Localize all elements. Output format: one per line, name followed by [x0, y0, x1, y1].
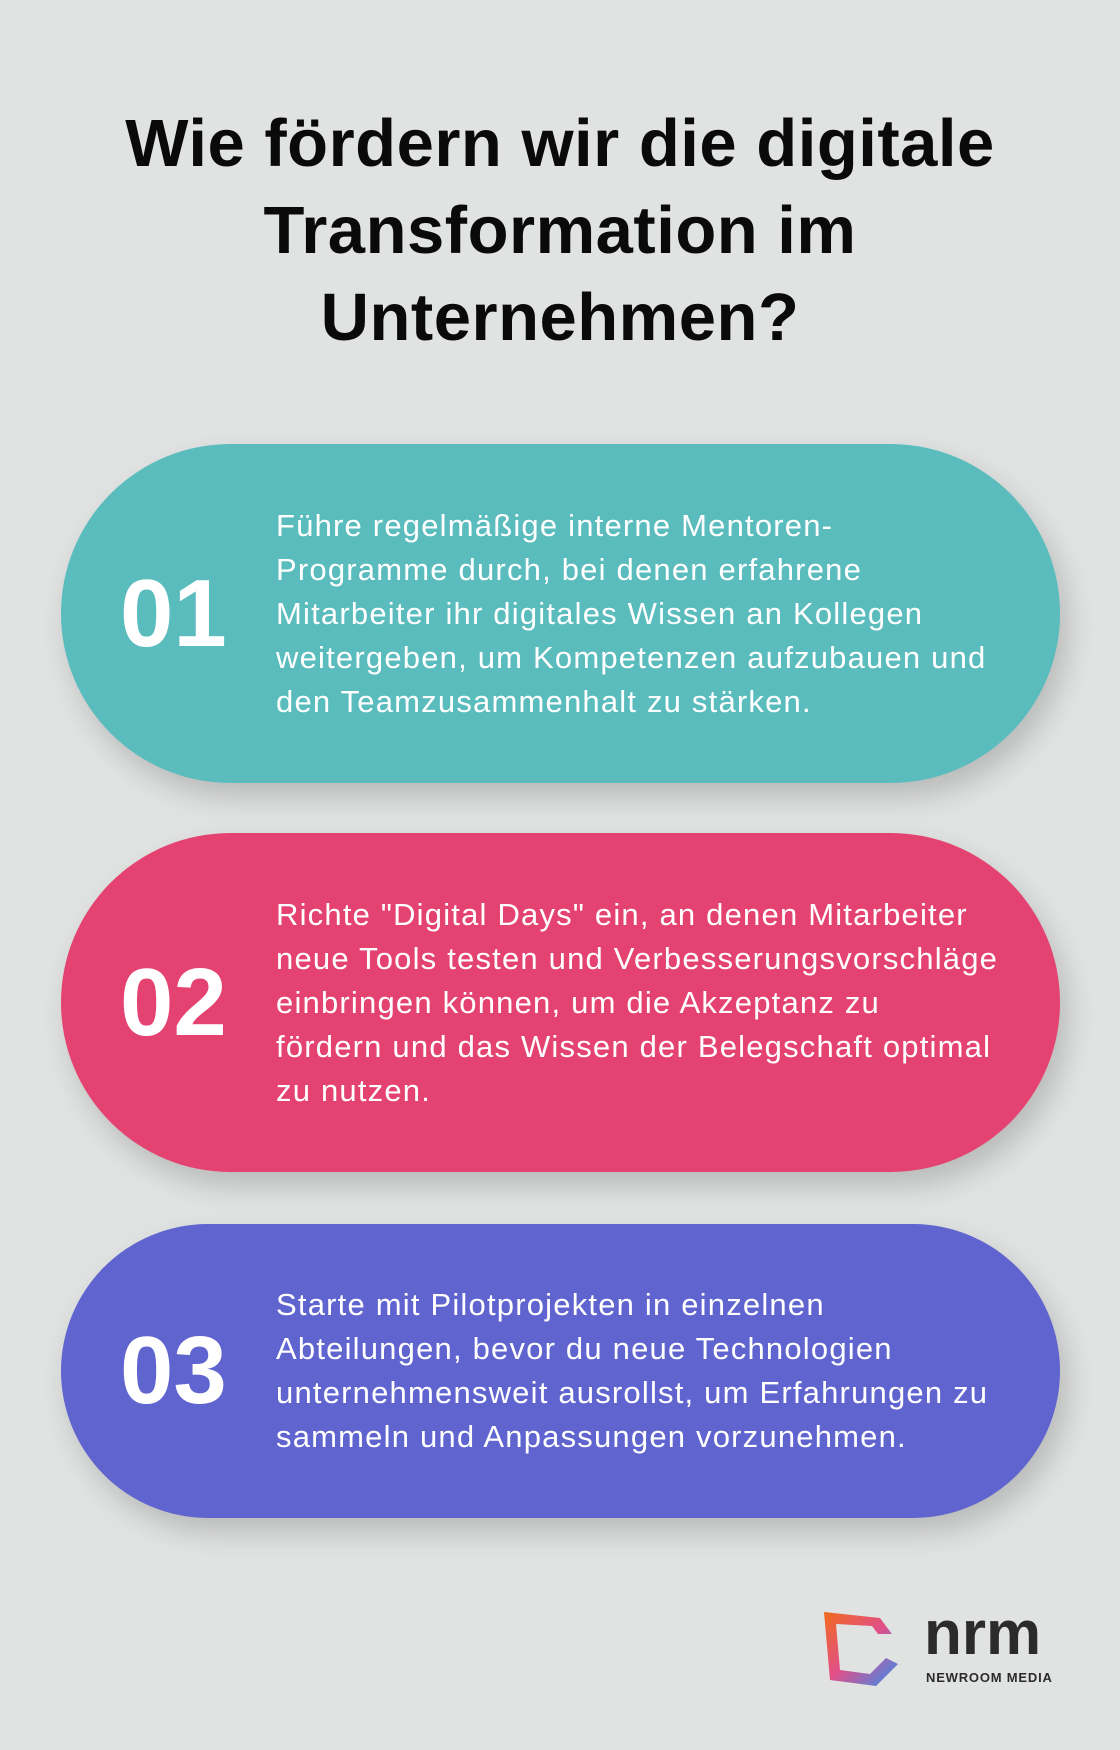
number 03: 03 [120, 1317, 227, 1424]
panel: step 01 [61, 444, 1060, 783]
text 01: Mitarbeiter ihr digitales Wissen an Kollegen [276, 596, 923, 630]
title: Unternehmen? [321, 280, 799, 355]
logo subtitle: NEWROOM MEDIA [926, 1670, 1053, 1685]
logo text: nrm [924, 1599, 1041, 1668]
text 03 [276, 1287, 988, 1454]
text 02: einbringen können, um die Akzeptanz zu [276, 984, 880, 1020]
panel: step 02 [61, 833, 1060, 1172]
text 02: neue Tools testen und Verbesserungsvorschläge [276, 940, 998, 976]
text 01: den Teamzusammenhalt zu stärken. [276, 684, 812, 718]
text 03: Starte mit Pilotprojekten in einzelnen [276, 1287, 825, 1322]
title: Transformation im [264, 193, 856, 268]
text 03: Abteilungen, bevor du neue Technologien [276, 1331, 893, 1366]
text 01: weitergeben, um Kompetenzen aufzubauen und [276, 640, 986, 674]
text 01: Führe regelmäßige interne Mentoren- [276, 508, 833, 542]
text 03: unternehmensweit ausrollst, um Erfahrungen zu [276, 1375, 988, 1410]
text 02: fördern und das Wissen der Belegschaft optimal [276, 1028, 991, 1064]
panel: step 03 [61, 1224, 1060, 1518]
text 01 [276, 508, 986, 718]
text 03: sammeln und Anpassungen vorzunehmen. [276, 1419, 907, 1454]
number 02: 02 [120, 948, 227, 1056]
text 02: zu nutzen. [276, 1072, 431, 1108]
text 02 [276, 896, 998, 1108]
number 01: 01 [120, 560, 227, 666]
text 01: Programme durch, bei denen erfahrene [276, 552, 862, 586]
logo [824, 1599, 1053, 1686]
title [125, 106, 995, 355]
title: Wie fördern wir die digitale [125, 106, 995, 181]
text 02: Richte "Digital Days" ein, an denen Mitarbeiter [276, 896, 968, 932]
icon: logo mark [824, 1612, 898, 1686]
